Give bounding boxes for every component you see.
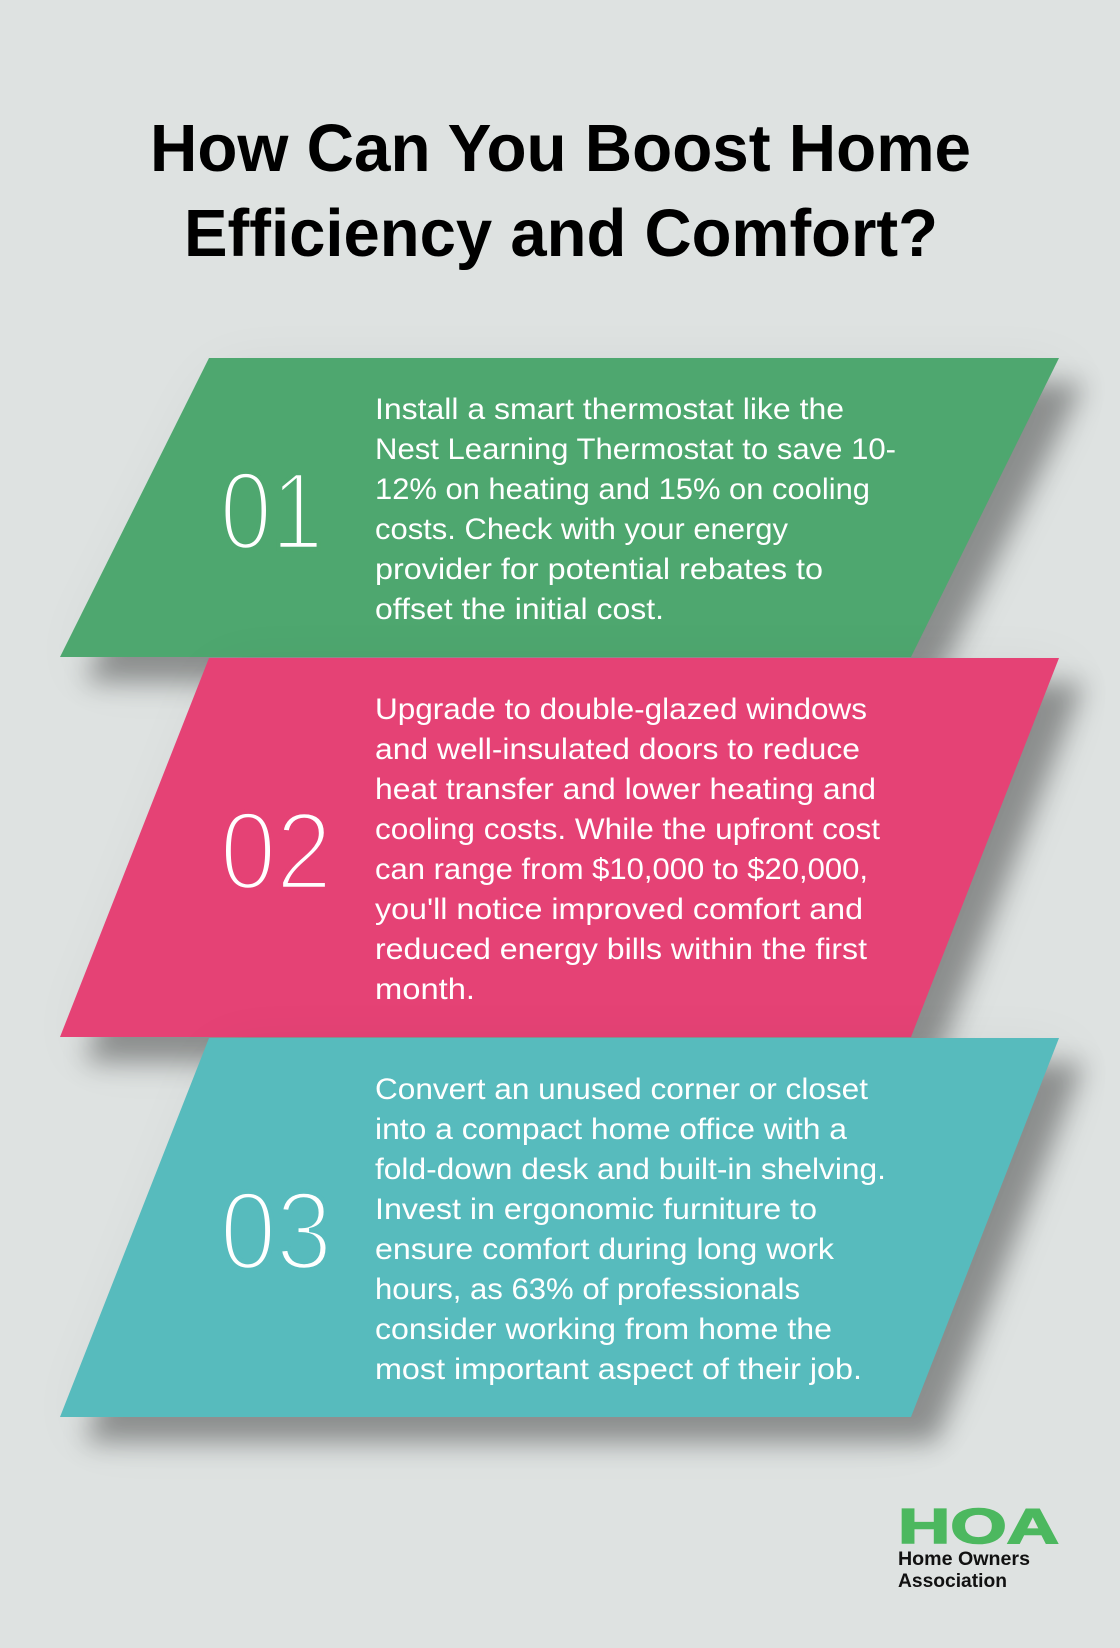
step 01 text: offset the initial cost.: [375, 593, 664, 626]
step 01 text: provider for potential rebates to: [375, 553, 823, 586]
step 03 text: into a compact home office with a: [375, 1113, 847, 1146]
step 02 text: heat transfer and lower heating and: [375, 773, 876, 806]
step 02 text: can range from $10,000 to $20,000,: [375, 853, 868, 886]
step 01 text: Install a smart thermostat like the: [375, 393, 844, 426]
step 03 text: consider working from home the: [375, 1313, 832, 1346]
title: How Can You Boost Home: [150, 111, 971, 186]
title: [150, 111, 971, 271]
panel: step 01: [60, 358, 1084, 682]
step 02 text: reduced energy bills within the first: [375, 933, 868, 966]
step 03 text: Invest in ergonomic furniture to: [375, 1193, 817, 1226]
step 03 text: most important aspect of their job.: [375, 1353, 862, 1386]
logo: HOA Home Owners Association: HOA: [898, 1500, 1059, 1554]
step 02 text: you'll notice improved comfort and: [375, 893, 863, 926]
logo: HOA Home Owners Association: Association: [898, 1571, 1007, 1592]
step 03 text: [375, 1073, 886, 1386]
step 03 text: hours, as 63% of professionals: [375, 1273, 800, 1306]
step number 02: 02: [220, 790, 332, 913]
logo: HOA Home Owners Association: [898, 1500, 1059, 1592]
step 03 text: Convert an unused corner or closet: [375, 1073, 869, 1106]
step 03 text: ensure comfort during long work: [375, 1233, 835, 1266]
step 01 text: [375, 393, 896, 626]
step 02 text: cooling costs. While the upfront cost: [375, 813, 881, 846]
step 02 text: [375, 693, 881, 1006]
step number 03: 03: [220, 1170, 332, 1293]
title: Efficiency and Comfort?: [184, 196, 938, 271]
step 02 text: Upgrade to double-glazed windows: [375, 693, 867, 726]
step 03 text: fold-down desk and built-in shelving.: [375, 1153, 886, 1186]
step 01 text: costs. Check with your energy: [375, 513, 788, 546]
step 02 text: and well-insulated doors to reduce: [375, 733, 860, 766]
step 02 text: month.: [375, 973, 475, 1006]
logo: HOA Home Owners Association: Home Owners: [898, 1549, 1030, 1570]
panel: step 02: [60, 658, 1084, 1062]
panel: step 03: [60, 1038, 1084, 1442]
step number 01: 01: [220, 450, 323, 573]
step 01 text: 12% on heating and 15% on cooling: [375, 473, 870, 506]
step 01 text: Nest Learning Thermostat to save 10-: [375, 433, 896, 466]
